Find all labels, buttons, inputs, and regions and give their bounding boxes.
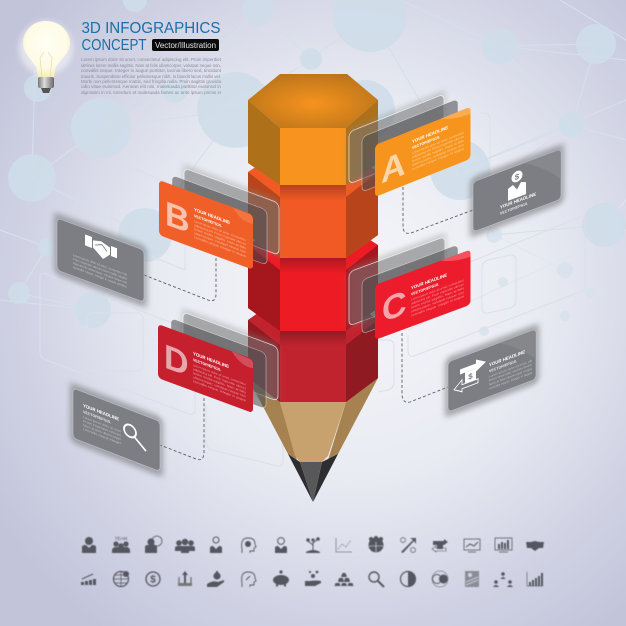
body text: ullamcorper, volutpat neque non: [194, 231, 246, 254]
intro text block: [81, 57, 222, 95]
headline: YOUR HEADLINE: [83, 403, 119, 423]
intro text block: convallis neque. Integer in augue porttitor, lacinia libero sed, tincidunt: [81, 68, 222, 73]
intro text block: mauris. Suspendisse efficitur pellentesque nibh, in blandit lacus mollis vel.: [81, 74, 221, 79]
icon: team: [112, 536, 130, 553]
panel: gray D: VECTOR/EPS10.: [83, 409, 111, 425]
intro text block: Morbi non pellentesque mattis, sed fringilla nulla. Proin sagittis gravida: [81, 79, 221, 84]
panel: gray B: [54, 212, 147, 308]
body text: adipiscing elit. Proin imperdiet ultrices: [412, 134, 464, 159]
headline: YOUR HEADLINE: [193, 351, 229, 370]
icon: businessman with dollar: $: [515, 172, 520, 182]
letter A: A: [381, 144, 406, 191]
icon: resume document: [465, 571, 479, 587]
icon: head idea: [242, 572, 256, 587]
icon row 1: [82, 536, 544, 553]
icon: idea person: [210, 537, 222, 553]
icon: hand with money bag: [207, 571, 224, 587]
icon: dollar cycle: [146, 572, 160, 586]
icon: rising arrow: [401, 538, 416, 553]
icon: handshake: [526, 541, 544, 551]
title: [82, 20, 220, 54]
body text: [412, 130, 464, 171]
body text: Proin imperdiet ultrices lorem: [489, 362, 532, 383]
body text: Nam at felis ullamcorper: [83, 423, 121, 441]
body text: lorem mollis sagittis. Nam at felis: [193, 371, 247, 395]
headline: YOUR HEADLINE: [500, 192, 536, 211]
icon: dollar cycle: $: [150, 574, 156, 586]
body text: convallis neque. Integer in augue: [193, 379, 246, 403]
body text: Nam at felis ullamcorper, volutpat neque non: [73, 261, 127, 285]
body text: Lorem ipsum dolor sit amet: [83, 415, 121, 433]
headline: YOUR HEADLINE: [411, 272, 447, 292]
icon: handshake: [85, 234, 117, 264]
pencil segment: red: [248, 236, 378, 331]
icon: money up arrows: [178, 571, 192, 586]
icon: businessman dollar: [82, 537, 96, 553]
glass layers D: [171, 308, 279, 409]
icon: team: TEAM: [115, 536, 127, 541]
card B: VECTOR/EPS10.: [194, 213, 222, 228]
headline: YOUR HEADLINE: [194, 207, 230, 226]
body text: [411, 278, 465, 318]
glass layers B: [172, 164, 280, 265]
panel: gray A: VECTOR/EPS10.: [500, 201, 528, 216]
icon: line chart: [336, 538, 352, 552]
card B: [159, 180, 253, 270]
icon: piggy bank: [273, 570, 289, 586]
body text: lorem mollis sagittis. Nam at felis: [412, 138, 464, 163]
icon: currency coins: [400, 572, 416, 586]
vector illustration badge: [152, 39, 219, 51]
card C: [375, 250, 470, 340]
icon row 2: [81, 570, 543, 587]
body text: adipiscing elit. Proin imperdiet ultrices: [411, 282, 464, 306]
card D: [158, 324, 253, 413]
body text: Lorem ipsum dolor sit amet, elit: [489, 359, 532, 379]
body text: convallis neque integer: [83, 427, 121, 445]
pencil segment: top hexagon: [248, 74, 378, 185]
body text: convallis neque. Integer in augue porttitor: [73, 265, 127, 289]
card A: VECTOR/EPS10.: [412, 134, 440, 150]
card A: [375, 107, 470, 197]
glass layers C: [348, 232, 458, 334]
letter B: B: [165, 194, 190, 241]
dashed connectors: [144, 187, 473, 460]
letter D: D: [164, 337, 189, 384]
body text: [193, 363, 247, 403]
body text: Lorem ipsum dolor sit amet, consectetur: [193, 363, 246, 387]
icon: currency exchange: [432, 571, 448, 587]
icon: money exchange: [432, 539, 448, 552]
pencil tip: wood: [248, 378, 378, 462]
icon: money plant: [306, 537, 320, 553]
body text: convallis neque. Integer in augue: [411, 294, 464, 318]
vector illustration badge: Vector/Illustration: [155, 41, 216, 50]
headline: YOUR HEADLINE: [489, 349, 525, 369]
body text: lorem mollis sagittis. Nam at felis: [194, 227, 247, 250]
body text: Lorem ipsum dolor sit amet, consectetur: [412, 131, 464, 155]
body text: Lorem ipsum dolor sit amet, consectetur elit: [73, 253, 127, 277]
icon: hand with coins: [305, 571, 321, 586]
body text: ullamcorper, volutpat neque non: [412, 142, 464, 167]
icon: target person: [275, 538, 287, 553]
body text: [73, 253, 127, 289]
icon: magnifier dollar: [369, 572, 384, 587]
panel: gray C: VECTOR/EPS10.: [489, 358, 517, 374]
body text: [194, 219, 247, 258]
body text: lorem mollis sagittis. Nam at felis: [411, 286, 465, 310]
network pattern: [0, 0, 626, 390]
card D: VECTOR/EPS10.: [193, 357, 221, 372]
icon: organisation: [493, 572, 513, 587]
pencil: [248, 74, 378, 502]
icon: bar chart monitor: [495, 538, 512, 552]
body text: convallis neque. Integer in augue: [489, 371, 532, 391]
icon: growth bars: [81, 574, 96, 585]
headline: YOUR HEADLINE: [412, 125, 448, 145]
icon: globe dollar: [114, 571, 129, 586]
letter C: C: [382, 283, 407, 330]
body text: Lorem ipsum dolor sit amet, consectetur: [411, 278, 464, 302]
panel: gray A: [470, 143, 564, 238]
pencil segment: orange: [248, 164, 378, 258]
intro text block: Lorem ipsum dolor sit amet, consectetur adipiscing elit. Proin imperdiet: [81, 57, 222, 62]
body text: adipiscing elit. Proin imperdiet ultrices: [194, 223, 246, 246]
body text: Proin imperdiet ultrices lorem mollis sagittis: [73, 257, 127, 281]
glass layers A: [348, 90, 458, 192]
icon: monitor chart: [464, 539, 480, 552]
body text: Nam at felis ullamcorper neque: [489, 366, 532, 387]
intro text block: odio vitae euismod. Aenean elit nisi, malesuada porttitor euismod in: [81, 84, 221, 89]
body text: [489, 358, 532, 391]
panel: gray C: [445, 323, 539, 418]
light bulb icon: [19, 21, 73, 93]
icon: magnifier: [124, 423, 146, 451]
icon: rising bar chart: [527, 572, 543, 586]
title: CONCEPT: [82, 37, 147, 54]
pencil segment: dark red: [248, 310, 378, 402]
wireframe outline panels: [40, 113, 585, 466]
body text: adipiscing elit. Proin imperdiet ultrices: [193, 367, 246, 391]
card C: VECTOR/EPS10.: [411, 281, 439, 297]
pencil tip: lead: [288, 454, 338, 502]
body text: ullamcorper, volutpat neque non: [411, 290, 464, 314]
icon: head gear: [242, 538, 256, 553]
intro text block: dignissim in mi. Interdum et malesuada fames ac ante ipsum primis in: [81, 90, 221, 95]
body text: Lorem ipsum dolor sit amet, consectetur: [194, 219, 246, 242]
icon: gold bars: [334, 573, 354, 586]
icon: time management: [145, 536, 162, 553]
body text: ullamcorper, volutpat neque non: [193, 375, 246, 399]
icon: group: [175, 539, 195, 553]
body text: convallis neque. Integer in augue: [194, 235, 246, 258]
body text: [83, 415, 122, 446]
icon: money exchange arrows: $: [468, 371, 473, 382]
intro text block: ultrices lorem mollis sagittis. Nam at felis ullamcorper, volutpat neque non,: [81, 63, 221, 68]
body text: Proin imperdiet ultrices: [83, 419, 122, 438]
icon: global team: [368, 536, 384, 553]
title: 3D INFOGRAPHICS: [82, 20, 220, 37]
body text: convallis neque. Integer in augue: [412, 146, 464, 171]
panel: gray D: [70, 382, 163, 478]
